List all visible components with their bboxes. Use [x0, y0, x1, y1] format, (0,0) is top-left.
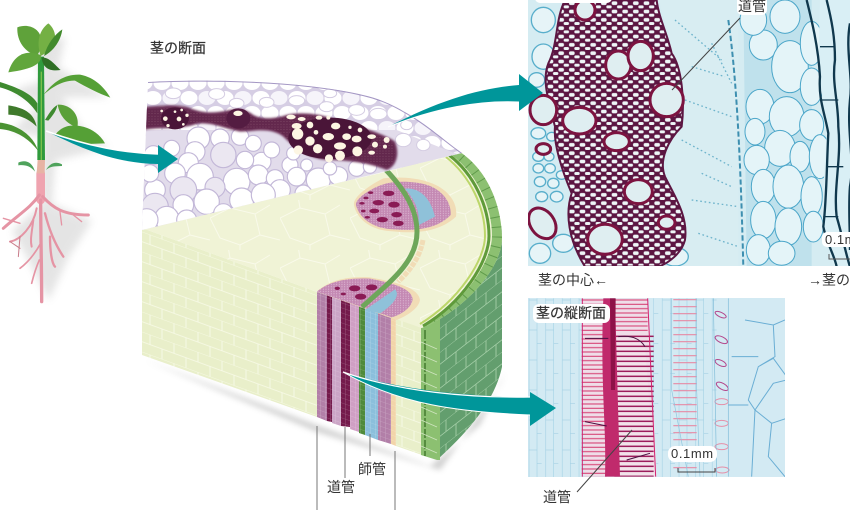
- background tissue: [143, 80, 462, 216]
- scale label lower micrograph: 0.1mm: [671, 446, 714, 461]
- right large cells: [728, 320, 787, 477]
- light ladder vessel: [673, 298, 697, 472]
- heading: stem cross section: 茎の断面: [150, 40, 206, 56]
- pith cells: [135, 127, 463, 233]
- dark outer tissue lines: [807, 0, 850, 267]
- label: xylem vessel: 道管: [327, 479, 355, 495]
- lower micrograph: longitudinal section: [528, 298, 787, 478]
- stem block 3D illustration: [142, 150, 505, 470]
- stem cross-section micrograph: [135, 78, 470, 233]
- outer green wall: [422, 225, 502, 460]
- scale label lower micrograph: [668, 446, 717, 472]
- upper cortex larger cells: [165, 88, 430, 151]
- lower vascular bundle top: [317, 277, 420, 320]
- ring vessel: [713, 298, 730, 477]
- dark vascular band: [143, 105, 397, 170]
- arrow: plant to cross section: [46, 131, 178, 173]
- large vessels: [523, 0, 683, 254]
- leader line: vessel: [672, 18, 740, 90]
- caption: toward stem center: 茎の中心←: [538, 272, 608, 288]
- stem: [37, 57, 45, 160]
- plant shadow: [12, 37, 109, 301]
- label: phloem: 師管: [358, 461, 386, 477]
- micrograph background: [528, 298, 785, 477]
- cream scallops along arc: [398, 240, 423, 282]
- label: top crop of cross section title: [535, 0, 612, 3]
- arrow: cross section to micrograph: [388, 74, 543, 127]
- upper right micrograph: cross section: [523, 0, 850, 267]
- xylem vessels magenta: [582, 298, 657, 477]
- outer green ring: [426, 150, 498, 332]
- right parenchyma: [743, 0, 812, 267]
- label: longitudinal section: 茎の縦断面: [536, 305, 606, 321]
- icon: whole plant with roots: [0, 23, 110, 302]
- outer epidermis cells background: [819, 26, 832, 222]
- roots: [3, 173, 88, 302]
- right cut face cream: [396, 318, 422, 455]
- leaves: [0, 23, 110, 172]
- green epidermis strip: [421, 316, 440, 460]
- leader line: vessel lower: [577, 430, 632, 492]
- scale label upper micrograph: [822, 232, 850, 259]
- left cut face: [142, 228, 317, 417]
- upper vascular bundle: [354, 178, 456, 232]
- arrow: block to longitudinal micrograph: [343, 372, 556, 426]
- leader lines under block: [317, 426, 395, 510]
- micrograph background: [528, 0, 850, 266]
- vascular bundle columns: [317, 292, 396, 446]
- label: vessel lower: 道管: [543, 489, 571, 505]
- top surface cream: [142, 152, 502, 328]
- left small cells: [529, 7, 688, 266]
- xylem cluster: [546, 0, 686, 267]
- block shadow: [145, 360, 505, 470]
- phloem pale tissue: [658, 0, 738, 267]
- top outline of stem: [148, 81, 462, 153]
- inner green arc: [362, 170, 417, 307]
